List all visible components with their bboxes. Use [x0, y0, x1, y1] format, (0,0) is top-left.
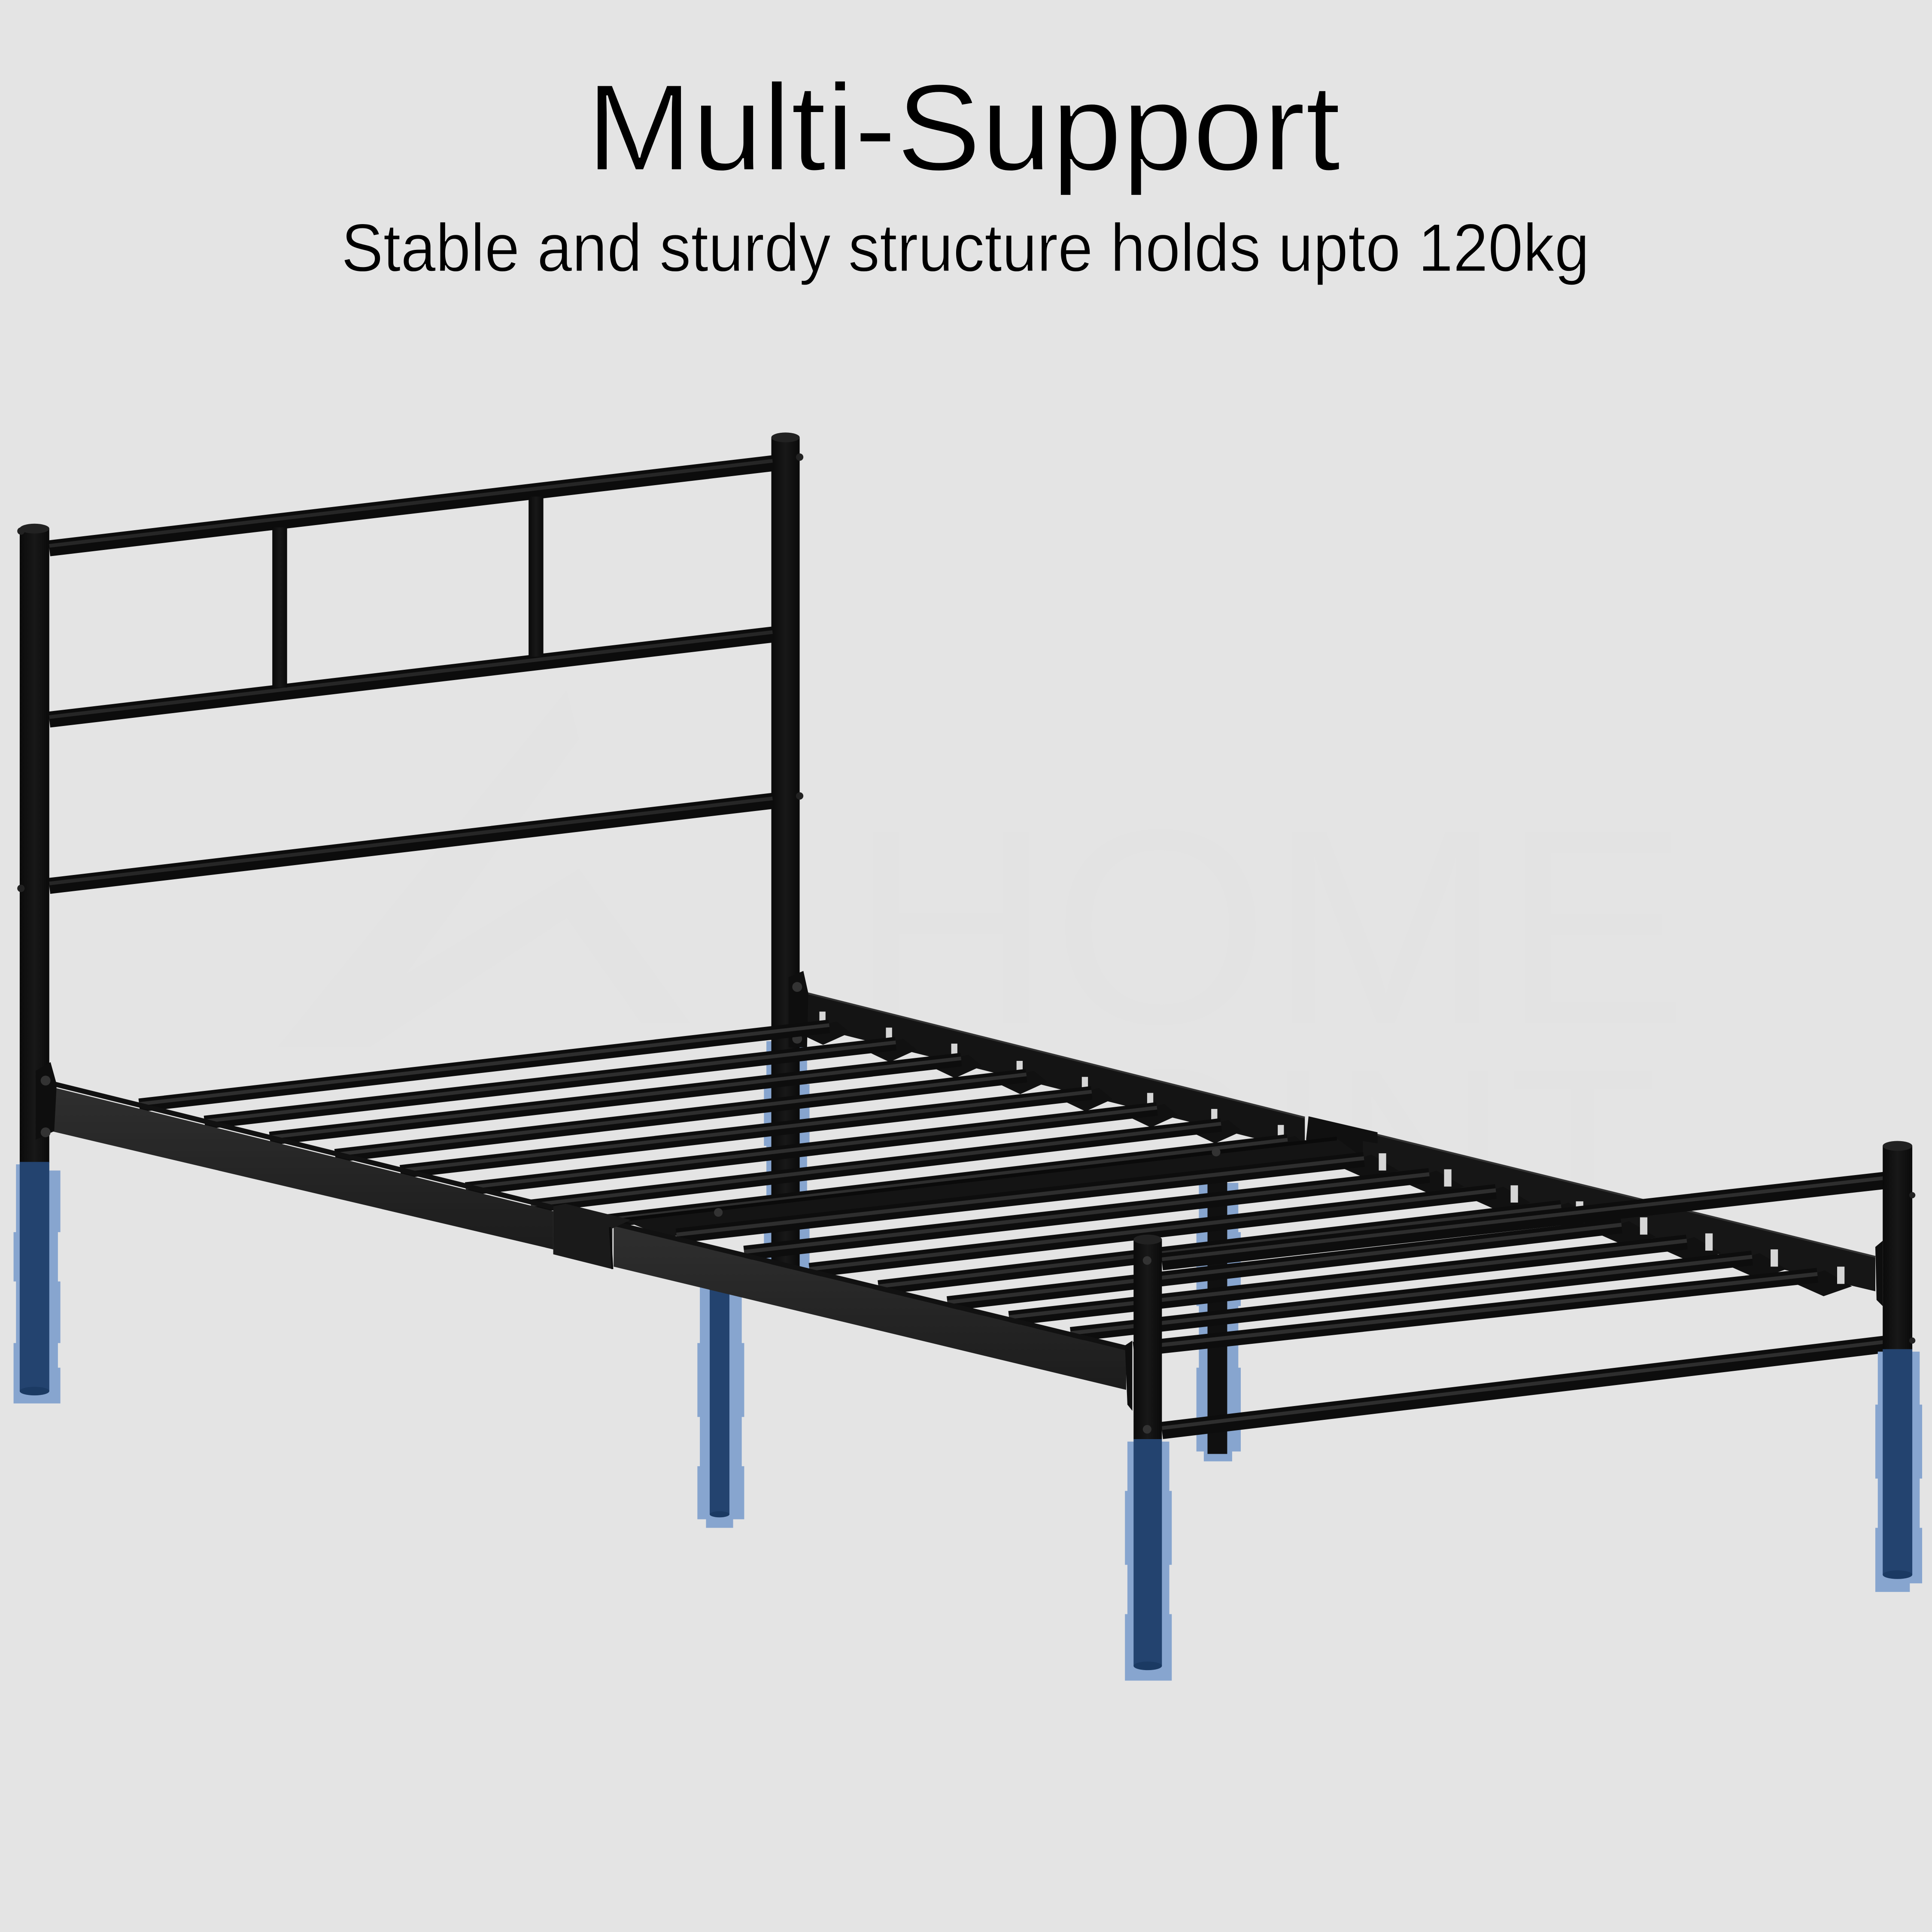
footboard left post with support highlight — [1125, 1235, 1172, 1681]
watermark logo — [277, 690, 1688, 1282]
footboard right post with support highlight — [1875, 1141, 1922, 1592]
title: Multi-Support — [586, 58, 1341, 197]
rail slat tabs — [795, 1021, 1852, 1296]
rail slots — [819, 1012, 1844, 1284]
near side rail — [41, 1084, 1126, 1390]
rear headboard post with support highlight — [764, 432, 810, 1269]
middle support leg — [697, 1286, 744, 1528]
rear rail sleeve — [1306, 1116, 1378, 1170]
watermark logo: POINT — [912, 1020, 1657, 1282]
left headboard post with support highlight — [14, 524, 61, 1403]
headboard rails and bars — [49, 461, 772, 886]
rear side rail — [795, 993, 1875, 1296]
subtitle: Stable and sturdy structure holds upto 120kg — [341, 210, 1589, 286]
rail sleeve — [553, 1204, 631, 1269]
footboard rails — [1162, 1178, 1885, 1431]
slats: head section — [139, 1025, 1288, 1222]
watermark logo: HOME — [850, 772, 1688, 1081]
center support beam — [622, 1139, 1360, 1237]
rear middle support leg — [1197, 1177, 1241, 1461]
rear rail bracket — [789, 971, 808, 1047]
near rail bracket — [36, 1062, 57, 1140]
slats: foot section — [677, 1158, 1817, 1349]
